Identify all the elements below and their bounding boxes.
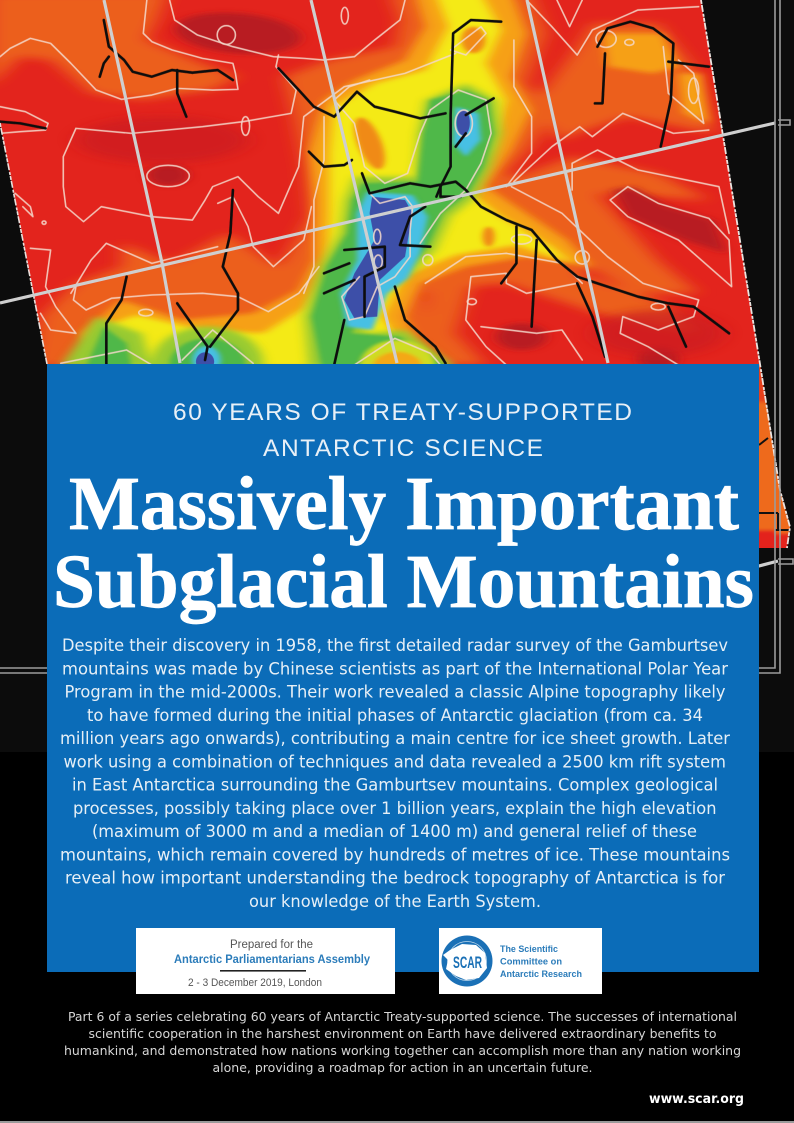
- footer note: scientific cooperation in the harshest environment on Earth have delivered extraordinary benefits to: [88, 1026, 717, 1041]
- footer note: Part 6 of a series celebrating 60 years of Antarctic Treaty-supported science. The successes of international: [68, 1009, 737, 1024]
- footer note: [64, 1009, 741, 1075]
- cyan basin margin: [192, 107, 481, 374]
- orange inclusions inside yellow: [348, 27, 495, 247]
- title: Massively Important: [69, 462, 739, 546]
- body text: (maximum of 3000 m and a median of 1400 m) and general relief of these: [92, 822, 697, 841]
- footer note: alone, providing a roadmap for action in an uncertain future.: [212, 1060, 592, 1075]
- logo: prepared for the Antarctic Parliamentarians Assembly: [136, 928, 395, 994]
- body text: to have formed during the initial phases of Antarctic glaciation (from ca. 34: [87, 706, 703, 725]
- icon: SCAR roundel: SCAR: [453, 953, 482, 972]
- topographic radar map of the Gamburtsev mountains: [0, 0, 794, 548]
- SCAR name text: Antarctic Research: [500, 969, 582, 980]
- body text: in East Antarctica surrounding the Gamburtsev mountains. Complex geological: [72, 776, 718, 794]
- dark red highlands: [148, 8, 727, 370]
- map edge outline: [0, 123, 47, 364]
- grey survey grid lines: [0, 0, 778, 567]
- right-hand map sliver beyond the panel: [756, 364, 790, 536]
- body text: Program in the mid-2000s. Their work revealed a classic Alpine topography likely: [64, 682, 726, 702]
- green lowlands: [61, 83, 501, 400]
- body text: our knowledge of the Earth System.: [249, 892, 541, 911]
- body text: mountains, which remain covered by hundreds of metres of ice. These mountains: [60, 845, 730, 864]
- body text: processes, possibly taking place over 1 billion years, explain the high elevation: [73, 799, 716, 818]
- title: Subglacial Mountains: [53, 540, 754, 624]
- SCAR name text: [500, 944, 582, 980]
- amber elevation zones: [81, 0, 709, 367]
- orange elevation zones: [0, 0, 714, 367]
- body text: reveal how important understanding the bedrock topography of Antarctica is for: [65, 868, 725, 888]
- logo: SCAR: [439, 928, 602, 994]
- SCAR name text: The Scientific: [500, 944, 558, 955]
- white elevation contours: [0, 0, 732, 365]
- panel: blue text panel: [47, 364, 759, 972]
- body text: million years ago onwards), contributing a main centre for ice sheet growth. Later: [60, 729, 730, 748]
- title: [53, 462, 754, 624]
- SCAR name text: Committee on: [500, 956, 562, 968]
- kicker heading: 60 YEARS OF TREATY-SUPPORTED: [173, 399, 632, 426]
- blue subglacial basin: [196, 110, 470, 371]
- logo: prepared for the Antarctic Parliamentarians Assembly: Prepared for the: [230, 939, 313, 951]
- footer note: humankind, and demonstrated how nations working together can accomplish more than any nation working: [64, 1043, 741, 1058]
- logo: prepared for the Antarctic Parliamentarians Assembly: 2 - 3 December 2019, London: [188, 977, 322, 989]
- yellow dome at lower centre: [356, 338, 438, 364]
- black subglacial drainage lines: [0, 20, 729, 365]
- icon: SCAR roundel: [442, 936, 492, 986]
- body text: [60, 636, 730, 911]
- body text: mountains was made by Chinese scientists as part of the International Polar Year: [62, 659, 728, 678]
- body text: work using a combination of techniques and data revealed a 2500 km rift system: [64, 752, 726, 771]
- kicker heading: [173, 399, 632, 462]
- kicker heading: ANTARCTIC SCIENCE: [263, 435, 543, 462]
- website link: www.scar.org: [649, 1092, 744, 1107]
- map frame double line: [0, 0, 793, 673]
- logo: prepared for the Antarctic Parliamentarians Assembly: Antarctic Parliamentarians Assembly: [174, 954, 371, 966]
- body text: Despite their discovery in 1958, the first detailed radar survey of the Gamburtsev: [62, 636, 728, 655]
- yellow elevation zones: [101, 0, 572, 367]
